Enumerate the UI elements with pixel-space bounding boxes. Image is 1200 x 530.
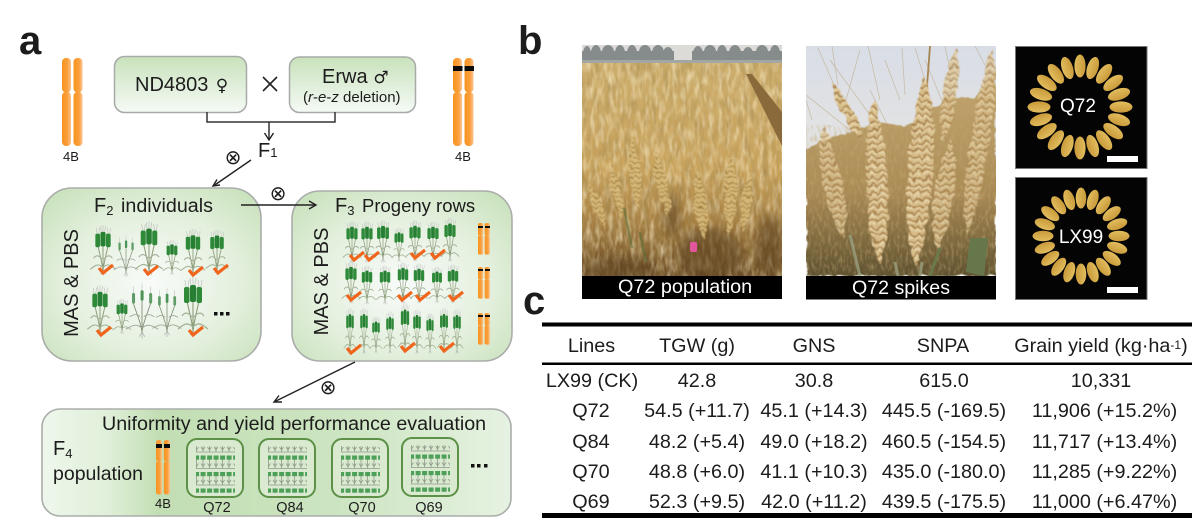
row Q72: 45.1 (+14.3) — [760, 400, 868, 422]
row LX99: 30.8 — [795, 370, 833, 392]
label Q72 grains: Q72 — [1060, 96, 1096, 117]
cross bracket arrow — [207, 112, 335, 140]
row LX99 — [546, 370, 1131, 392]
F2 heading: 2 — [106, 203, 113, 218]
F1 label: F1 — [258, 140, 277, 162]
selfing symbol 1: ⊗ — [225, 145, 241, 169]
row Q69: Q69 — [572, 491, 610, 513]
F4 population label: 4 — [65, 446, 72, 461]
label a: a — [19, 19, 42, 63]
caption Q72 population — [582, 276, 782, 299]
photo: LX99 grains — [1016, 178, 1147, 300]
F3 heading: F — [335, 195, 347, 217]
row Q72: Q72 — [572, 400, 610, 422]
parent ND4803: ND4803 — [135, 74, 208, 96]
chromosome 4B F4: 4B — [155, 496, 171, 511]
scale bar Q72 — [1107, 156, 1138, 162]
photo: Q72 spikes — [806, 46, 996, 300]
parent Erwa: Erwa — [322, 66, 368, 88]
plot Q69: Q69 — [415, 500, 443, 516]
F2 plants — [87, 221, 228, 339]
chromosome 4B F4 — [155, 440, 171, 511]
row Q72: 11,906 (+15.2%) — [1032, 400, 1177, 422]
row LX99: LX99 (CK) — [546, 370, 638, 392]
ellipsis F2 — [214, 312, 230, 316]
row Q69: 11,000 (+6.47%) — [1032, 491, 1177, 513]
ellipsis F4 — [471, 464, 488, 468]
row Q69: 439.5 (-175.5) — [882, 491, 1006, 513]
row Q84: 11,717 (+13.4%) — [1032, 431, 1177, 453]
panel c: yield table — [523, 279, 1192, 518]
table header — [568, 335, 1188, 357]
plot Q72 — [187, 439, 243, 516]
parent ND4803 — [114, 56, 246, 112]
table header: Grain yield (kg·ha — [1014, 335, 1170, 357]
row LX99: 42.8 — [678, 370, 716, 392]
table header: ) — [1181, 335, 1188, 357]
label c: c — [523, 279, 545, 323]
panel a: breeding scheme — [19, 19, 512, 516]
F4 heading: Uniformity and yield performance evaluation — [102, 413, 486, 435]
chromosome 4B left — [62, 58, 82, 164]
row Q70: Q70 — [572, 461, 610, 483]
F3 plants — [342, 218, 463, 354]
cross symbol — [263, 77, 277, 91]
label LX99 grains: LX99 — [1059, 227, 1103, 248]
plot Q70 — [332, 439, 388, 516]
chromosome 4B right with deletion: 4B — [455, 149, 471, 164]
row Q84: 460.5 (-154.5) — [882, 431, 1006, 453]
label b: b — [518, 19, 542, 63]
row Q70: 11,285 (+9.22%) — [1032, 461, 1177, 483]
F3 row chromosomes — [478, 223, 490, 345]
row Q72 — [572, 400, 1177, 422]
table header: TGW (g) — [659, 335, 735, 357]
arrow F1 to F2 — [213, 160, 251, 186]
parent Erwa: ♂ — [373, 68, 389, 88]
row Q72: 54.5 (+11.7) — [644, 400, 750, 422]
row Q69 — [572, 491, 1177, 513]
parent ND4803: ♀ — [216, 76, 228, 96]
panel b: photographs — [518, 19, 1147, 300]
plot Q84: Q84 — [276, 500, 304, 516]
selfing symbol 3: ⊗ — [320, 375, 336, 399]
selfing symbol 2: ⊗ — [270, 181, 286, 205]
photo: Q72 population — [582, 45, 784, 299]
row Q84: Q84 — [572, 431, 610, 453]
panel: F3 progeny rows — [292, 191, 512, 361]
MAS and PBS label F3: MAS & PBS — [311, 228, 333, 335]
table header: Lines — [568, 335, 615, 357]
F3 heading: 3 — [347, 203, 354, 218]
caption Q72 spikes: Q72 spikes — [852, 277, 950, 299]
row LX99: 615.0 — [919, 370, 969, 392]
panel: F2 individuals — [42, 188, 261, 361]
F4 population label — [53, 438, 143, 485]
row Q70: 48.8 (+6.0) — [649, 461, 745, 483]
plot Q70: Q70 — [348, 500, 376, 516]
parent Erwa — [290, 57, 416, 112]
F2 heading: individuals — [121, 195, 213, 217]
arrow F3 to F4 — [274, 362, 355, 402]
MAS and PBS label F2: MAS & PBS — [61, 229, 83, 337]
row Q84 — [572, 431, 1177, 453]
plot Q72: Q72 — [203, 500, 231, 516]
table header: -1 — [1170, 338, 1181, 352]
row Q69: 42.0 (+11.2) — [761, 491, 867, 513]
plot Q69 — [402, 438, 458, 516]
F4 population label: population — [53, 463, 143, 485]
table header: GNS — [793, 335, 835, 357]
chromosome 4B right with deletion — [453, 58, 474, 164]
scale bar LX99 — [1107, 287, 1138, 293]
row LX99: 10,331 — [1071, 370, 1131, 392]
row Q84: 49.0 (+18.2) — [760, 431, 868, 453]
photo: Q72 grains — [1016, 46, 1147, 168]
caption Q72 spikes — [806, 276, 996, 300]
grain ring Q72 — [1028, 54, 1132, 160]
F2 heading: F — [94, 195, 106, 217]
row Q70: 41.1 (+10.3) — [760, 461, 868, 483]
table rules — [542, 322, 1192, 518]
grain ring LX99 — [1032, 188, 1130, 284]
table header: SNPA — [917, 335, 970, 357]
row Q84: 48.2 (+5.4) — [649, 431, 745, 453]
row Q72: 445.5 (-169.5) — [882, 400, 1006, 422]
caption Q72 population: Q72 population — [618, 276, 752, 298]
panel: F4 population — [42, 409, 511, 516]
row Q69: 52.3 (+9.5) — [649, 491, 745, 513]
row Q70: 435.0 (-180.0) — [882, 461, 1006, 483]
plot Q84 — [259, 439, 315, 516]
parent Erwa: (r-e-z deletion) — [303, 89, 401, 106]
F3 heading: Progeny rows — [362, 195, 475, 216]
row Q70 — [572, 461, 1177, 483]
F4 population label: F — [53, 438, 65, 460]
chromosome 4B left: 4B — [63, 149, 79, 164]
arrow F2 to F3 — [241, 201, 316, 209]
